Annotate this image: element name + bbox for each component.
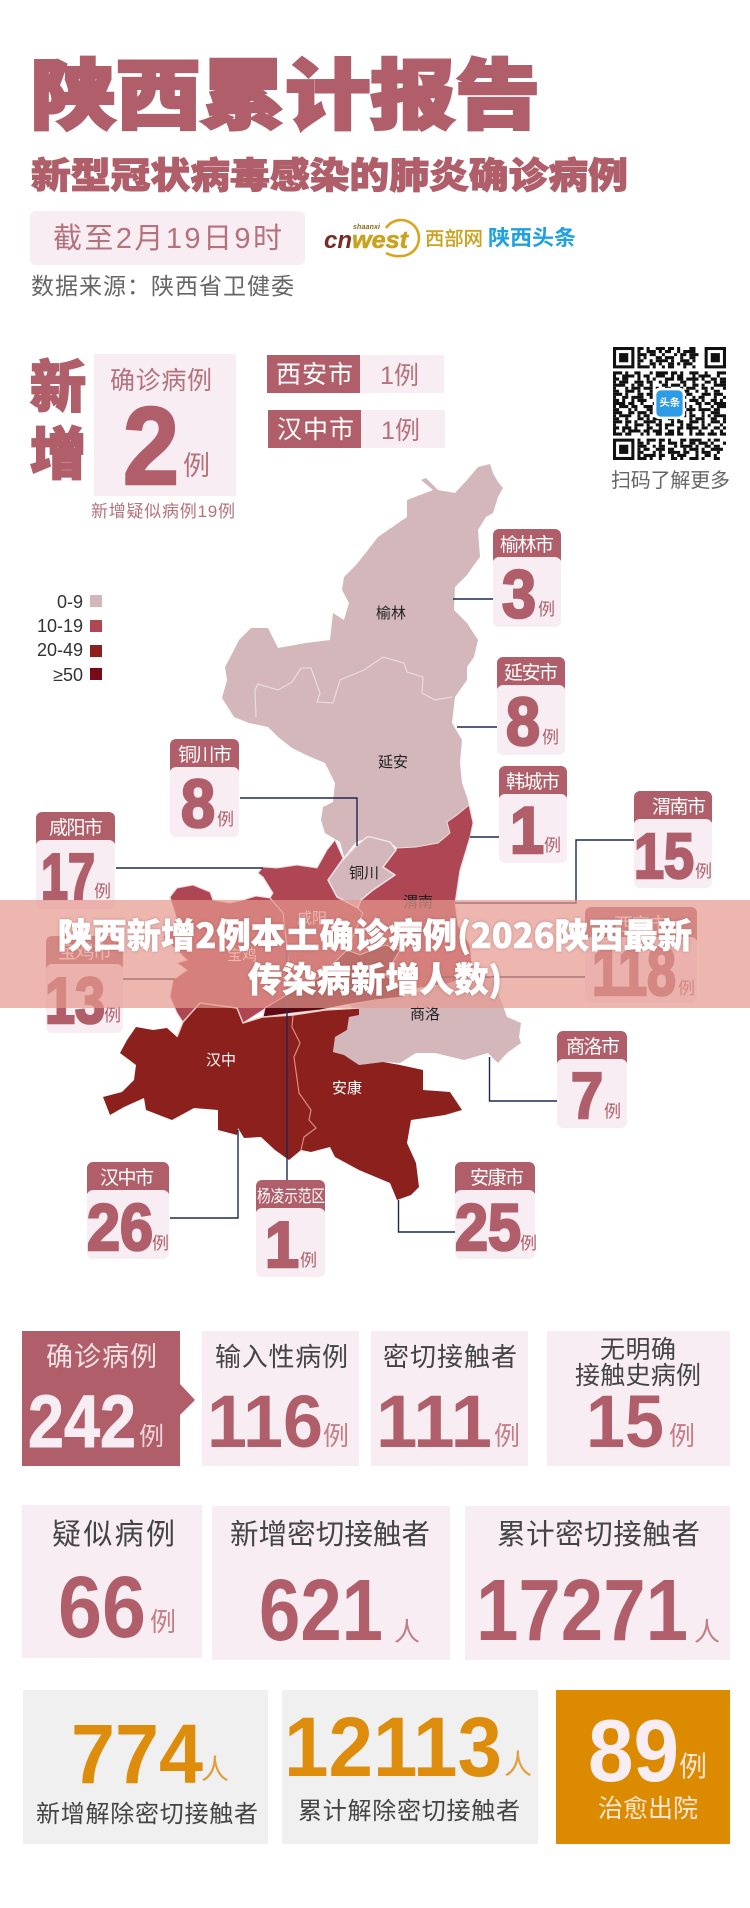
callout: Hanzhong: 例: [152, 1234, 169, 1253]
callout: Ankang: 例: [520, 1234, 537, 1253]
panel: suspected 66: 疑似病例: [52, 1518, 175, 1551]
callout: Hancheng: [499, 766, 567, 867]
panel: discharged 89: 治愈出院: [598, 1795, 698, 1823]
panel: cumulative released contacts 12113: 人: [504, 1749, 532, 1780]
callout: Baoji: 例: [104, 1006, 121, 1025]
panel: close contact 111: 密切接触者: [383, 1342, 517, 1372]
panel: cumulative close contacts 17271: 累计密切接触者: [497, 1519, 700, 1551]
logos: cnwest and toutiao: 西部网: [425, 228, 483, 250]
panel: close contact 111: 111: [376, 1380, 492, 1463]
callout: Tongchuan: 8: [181, 766, 215, 842]
QR code: [613, 349, 726, 458]
callout: Yan'an: 8: [506, 684, 540, 760]
panel: new released contacts 774: [23, 1690, 268, 1844]
overlay banner headline: 陕西新增2例本土确诊病例(2026陕西最新: [58, 908, 692, 958]
row: Hanzhong new: [268, 410, 445, 448]
map labels: 铜川: [349, 865, 379, 882]
callout: Ankang: [455, 1162, 537, 1264]
row: Hanzhong new: 1例: [381, 417, 420, 445]
panel: close contact 111: 例: [494, 1421, 520, 1451]
callout: Baoji: 宝鸡市: [58, 941, 112, 963]
panel: no clear contact 15: 15: [586, 1380, 664, 1463]
panel: cumulative close contacts 17271: 17271: [476, 1562, 688, 1659]
panel: confirmed 242: 例: [139, 1423, 164, 1451]
panel: discharged 89: [556, 1690, 730, 1844]
map boundary: south of Guanzhong: [177, 1003, 359, 1037]
panel: new confirmed: 例: [183, 451, 210, 481]
heading: new cases: 新: [30, 356, 86, 419]
panel: discharged 89: 例: [679, 1751, 707, 1782]
row: Xi'an new: 西安市: [276, 361, 353, 389]
panel: cumulative close contacts 17271: 人: [694, 1617, 720, 1647]
note: new suspected: 新增疑似病例19例: [91, 502, 235, 521]
panel: discharged 89: 89: [588, 1701, 679, 1800]
panel: new released contacts 774: 774: [71, 1707, 203, 1801]
panel: imported 116: 输入性病例: [215, 1342, 348, 1372]
panel: imported 116: [202, 1331, 359, 1466]
QR code: 头条: [659, 396, 681, 409]
map labels: 咸阳: [297, 910, 327, 927]
callout: Yangling: 例: [300, 1251, 317, 1270]
callout: Yan'an: [497, 657, 565, 760]
panel: cumulative released contacts 12113: 12113: [284, 1700, 502, 1794]
map region: Tongchuan: [328, 837, 396, 908]
panel: imported 116: 116: [207, 1380, 323, 1463]
map boundary: Yulin and Yan'an: [255, 657, 452, 717]
callout: Yulin: 榆林市: [500, 534, 554, 556]
logos: cnwest and toutiao: 陕西头条: [488, 227, 576, 250]
callout: Yulin: 例: [538, 600, 555, 619]
map region: Ankang: [292, 1008, 462, 1200]
title: 陕西累计报告: [31, 54, 540, 140]
legend: 20-49: [37, 640, 83, 660]
row: Xi'an new: [267, 355, 444, 393]
callout: Xi'an: 118: [592, 933, 676, 1010]
map labels: 安康: [332, 1080, 362, 1097]
heading: new cases: [30, 356, 86, 486]
legend: 0-9: [57, 592, 83, 612]
panel: suspected 66: 例: [150, 1607, 176, 1637]
panel: imported 116: 例: [323, 1421, 349, 1451]
map boundary: Hanzhong, Ankang: [292, 1015, 316, 1150]
callout: Xianyang: 17: [41, 840, 95, 913]
panel: cumulative released contacts 12113: [282, 1690, 538, 1844]
callout: Hanzhong: 26: [87, 1190, 153, 1264]
callout: Shangluo: 7: [571, 1059, 603, 1132]
panel: new confirmed: 确诊病例: [110, 367, 212, 395]
panel: suspected 66: 66: [58, 1559, 146, 1656]
map region: Weinan: [347, 805, 493, 990]
map region: Yulin and Yan'an: [222, 464, 503, 857]
panel: new confirmed: [94, 354, 236, 508]
leader lines: [116, 599, 634, 1232]
callout: Weinan: 15: [634, 820, 694, 892]
callout: Yangling: 杨凌示范区: [257, 1187, 325, 1206]
panel: new released contacts 774: 人: [201, 1754, 229, 1785]
callout: Tongchuan: [170, 739, 239, 842]
callout: Shangluo: [557, 1031, 627, 1132]
panel: no clear contact 15: 接触史病例: [575, 1362, 701, 1390]
panel: cumulative close contacts 17271: [465, 1506, 730, 1660]
callout: Hancheng: 韩城市: [506, 771, 560, 793]
callout: Ankang: 安康市: [470, 1167, 524, 1189]
map labels: 延安: [378, 754, 408, 771]
callout: Shangluo: 例: [604, 1102, 621, 1121]
callout: Yulin: [493, 529, 561, 632]
legend: ≥50: [53, 665, 83, 685]
callout: Baoji: [45, 936, 123, 1037]
logos: cnwest and toutiao: [324, 220, 576, 256]
logos: cnwest and toutiao: shaanxi: [353, 224, 381, 231]
callout: Weinan: [634, 791, 712, 892]
panel: confirmed 242: 确诊病例: [46, 1342, 157, 1372]
panel: suspected 66: [22, 1505, 202, 1658]
callout: Xianyang: 例: [94, 882, 111, 901]
panel: confirmed 242: 242: [28, 1380, 136, 1463]
map labels: 商洛: [410, 1006, 440, 1023]
map region: Shangluo: [333, 975, 521, 1065]
callout: Tongchuan: 铜川市: [178, 744, 232, 766]
panel: new close contacts 621: [212, 1506, 450, 1660]
callout: Hancheng: 1: [510, 793, 544, 867]
map of Shaanxi: [103, 464, 521, 1200]
panel: no clear contact 15: [547, 1331, 730, 1466]
callout: Xi'an: 西安市: [614, 914, 668, 936]
panel: new released contacts 774: 新增解除密切接触者: [36, 1801, 258, 1828]
callout: Yangling: 1: [265, 1208, 299, 1281]
map labels: [206, 605, 440, 1097]
date box: [30, 211, 305, 265]
callout: Tongchuan: 例: [217, 810, 234, 829]
callout: Weinan: 例: [695, 862, 712, 881]
callout: Xianyang: [36, 812, 115, 913]
logos: cnwest and toutiao: cn: [324, 227, 352, 254]
legend: [37, 592, 102, 685]
callout: Xianyang: 咸阳市: [49, 817, 103, 839]
callout: Baoji: 13: [45, 964, 105, 1037]
map region: Xi'an: [263, 945, 405, 1017]
panel: close contact 111: [371, 1331, 528, 1466]
panel: no clear contact 15: 无明确: [600, 1336, 676, 1364]
panel: cumulative released contacts 12113: 累计解除密切接触者: [298, 1798, 520, 1825]
panel: new confirmed: 2: [123, 385, 179, 508]
row: Xi'an new: 1例: [380, 362, 419, 390]
callout: Hanzhong: [87, 1162, 169, 1264]
data source: 数据来源：陕西省卫健委: [31, 273, 294, 299]
overlay banner headline: [0, 900, 750, 1008]
callout: Ankang: 25: [455, 1190, 521, 1264]
callout: Yulin: 3: [502, 556, 536, 632]
QR caption: 扫码了解更多: [611, 469, 730, 492]
panel: confirmed 242: [22, 1331, 195, 1466]
logos: cnwest and toutiao: west: [352, 227, 409, 254]
callout: Shangluo: 商洛市: [566, 1036, 620, 1058]
map labels: 榆林: [376, 605, 406, 622]
overlay banner headline: 传染病新增人数): [248, 952, 502, 1002]
panel: no clear contact 15: 例: [669, 1421, 695, 1451]
map region: Baoji: [163, 885, 290, 1023]
heading: new cases: 增: [30, 423, 86, 486]
map labels: 汉中: [206, 1052, 236, 1069]
map region: Hanzhong: [103, 1003, 316, 1160]
panel: new close contacts 621: 人: [394, 1617, 420, 1647]
callout: Yan'an: 例: [542, 728, 559, 747]
callout: Yan'an: 延安市: [504, 662, 558, 684]
row: Hanzhong new: 汉中市: [277, 416, 354, 444]
callout: Xi'an: 例: [678, 979, 695, 998]
panel: new close contacts 621: 621: [259, 1562, 383, 1659]
legend: 10-19: [37, 616, 83, 636]
callout: Hancheng: 例: [544, 836, 561, 855]
map labels: 渭南: [403, 894, 433, 911]
map labels: 宝鸡: [227, 947, 257, 964]
callout: Weinan: 渭南市: [652, 796, 706, 818]
panel: new close contacts 621: 新增密切接触者: [230, 1519, 430, 1551]
callout: Yangling: [256, 1180, 325, 1281]
date box: 截至2月19日9时: [53, 222, 282, 255]
callout: Xi'an: [585, 907, 697, 1010]
callout: Hanzhong: 汉中市: [100, 1167, 154, 1189]
map region: Xianyang: [258, 840, 363, 993]
subtitle: 新型冠状病毒感染的肺炎确诊病例: [31, 155, 628, 196]
